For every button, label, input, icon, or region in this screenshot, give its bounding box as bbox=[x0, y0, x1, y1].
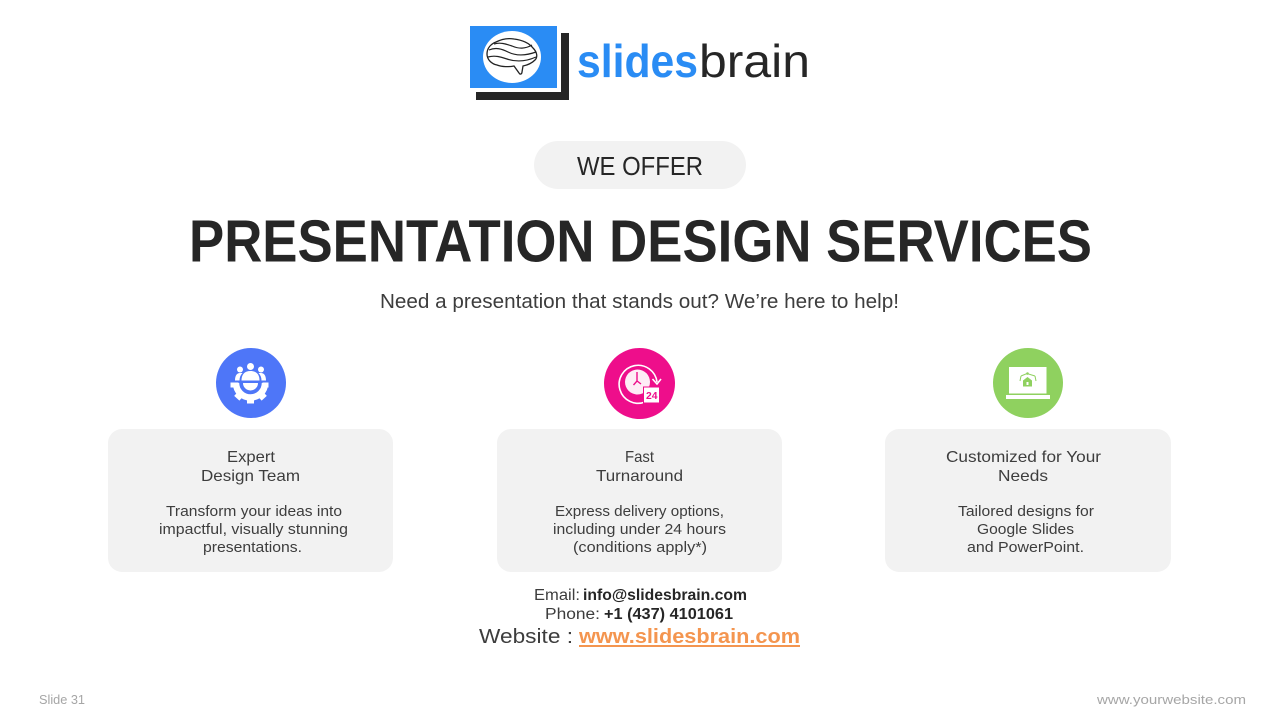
logo: slidesbrain bbox=[470, 26, 810, 100]
icon: customized laptop bbox=[993, 348, 1063, 418]
card heading: Turnaround bbox=[596, 468, 683, 485]
icon: expert team gear bbox=[216, 348, 286, 418]
logo wordmark: slides bbox=[577, 35, 698, 87]
logo blue square bbox=[470, 26, 557, 88]
card text: including under 24 hours bbox=[553, 522, 726, 538]
card heading: Fast bbox=[625, 449, 655, 466]
logo wordmark bbox=[577, 35, 810, 87]
card text: Transform your ideas into bbox=[166, 504, 342, 520]
card text bbox=[958, 504, 1094, 556]
card heading: Customized for Your bbox=[946, 449, 1102, 466]
website bbox=[479, 626, 800, 648]
card text: Express delivery options, bbox=[555, 504, 724, 520]
card heading: Expert bbox=[227, 449, 276, 466]
badge: we offer bbox=[534, 141, 746, 189]
icon: brain bbox=[483, 31, 541, 83]
card text: (conditions apply*) bbox=[573, 540, 707, 556]
card text: and PowerPoint. bbox=[967, 540, 1084, 556]
panel: fast turnaround bbox=[497, 429, 782, 572]
title: PRESENTATION DESIGN SERVICES bbox=[189, 208, 1092, 274]
card text: Google Slides bbox=[977, 522, 1074, 538]
card text bbox=[159, 504, 348, 556]
card heading bbox=[946, 449, 1102, 485]
website: Website : bbox=[479, 626, 573, 648]
email: Email: bbox=[534, 587, 580, 604]
contact details bbox=[479, 587, 800, 648]
badge: we offer: WE OFFER bbox=[577, 151, 703, 181]
card heading bbox=[596, 449, 683, 485]
phone: +1 (437) 4101061 bbox=[604, 606, 733, 623]
email: info@slidesbrain.com bbox=[583, 587, 747, 604]
card heading: Design Team bbox=[201, 468, 300, 485]
icon: fast turnaround clock bbox=[604, 348, 675, 419]
phone: Phone: bbox=[545, 606, 600, 623]
website: www.slidesbrain.com bbox=[578, 626, 800, 648]
card heading: Needs bbox=[998, 468, 1048, 485]
icon: fast turnaround clock: 24 bbox=[646, 391, 658, 402]
card text: impactful, visually stunning bbox=[159, 522, 348, 538]
phone bbox=[545, 606, 733, 623]
footer: slide number: Slide 31 bbox=[39, 692, 85, 707]
panel: customized for your needs bbox=[885, 429, 1171, 572]
logo wordmark: brain bbox=[699, 35, 810, 87]
card heading bbox=[201, 449, 300, 485]
subtitle: Need a presentation that stands out? We’re here to help! bbox=[380, 291, 899, 313]
card text: presentations. bbox=[203, 540, 302, 556]
card text: Tailored designs for bbox=[958, 504, 1094, 520]
footer: website: www.yourwebsite.com bbox=[1096, 693, 1246, 707]
panel: expert design team bbox=[108, 429, 393, 572]
logo shadow frame bbox=[476, 33, 569, 100]
card text bbox=[553, 504, 726, 556]
